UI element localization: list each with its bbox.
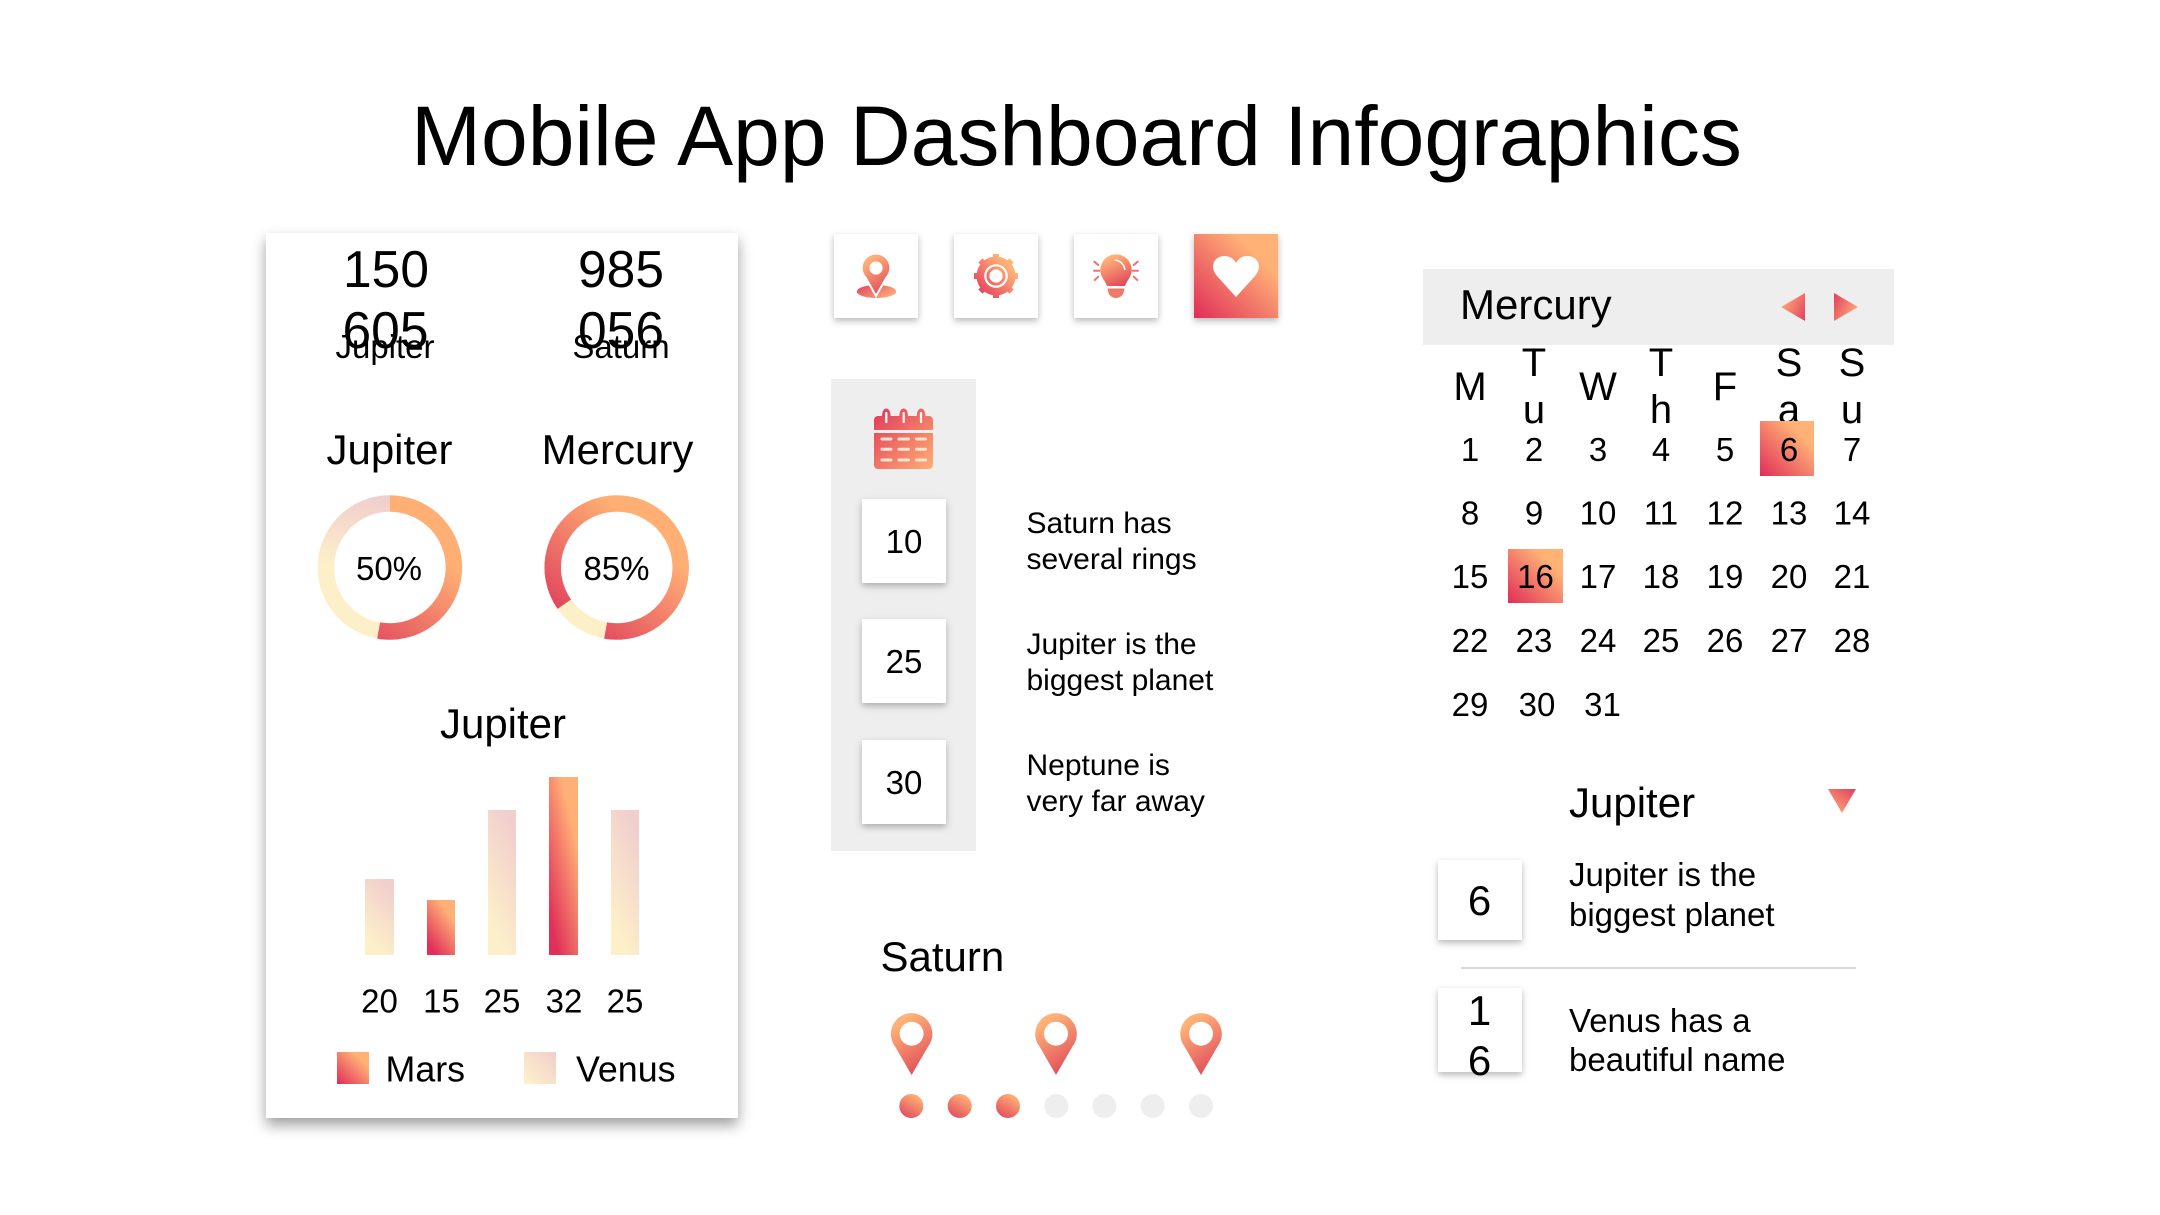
weekday labels: S [1839,341,1865,385]
panel: calendar list [831,379,976,851]
donut chart: Jupiter 50% [326,503,454,631]
text: Neptune is very far away: Neptune is [1026,749,1170,782]
list item: 6: 6 [1468,877,1491,924]
bar chart: 20 [361,982,398,1020]
legend [337,1050,676,1090]
list item: 16: Venus has a [1569,1002,1751,1039]
weekday labels: u [1841,388,1863,432]
weekday labels: W [1579,365,1617,409]
icon tile: heart [1194,234,1278,318]
title: Mobile App Dashboard Infographics [411,89,1742,183]
legend: Mars [386,1050,465,1090]
calendar dates: 24 [1580,622,1616,659]
calendar header [1423,269,1894,345]
list item: 16: 6 [1468,1037,1491,1084]
calendar dates: 19 [1707,558,1743,595]
text: Neptune is very far away: very far away [1026,785,1205,818]
weekday labels: T [1522,341,1546,385]
calendar dates: 30 [1519,686,1555,723]
item box: 30 [862,740,946,824]
donut chart: Mercury 85% [553,503,681,631]
calendar dates: 15 [1452,558,1488,595]
calendar dates: 8 [1461,494,1479,532]
heading: Jupiter dropdown: Jupiter [1569,779,1695,826]
stat: Saturn [572,240,670,365]
bar chart: 32 [546,982,582,1020]
calendar dates: 14 [1834,494,1870,532]
weekday labels [1453,341,1865,432]
stat: Jupiter: 150 [343,240,429,298]
stat: Saturn: 056 [578,301,664,359]
text: Neptune is very far away [1026,749,1205,818]
icon tile: location pin [834,234,918,318]
list item: 16: 1 [1468,987,1491,1034]
legend: Venus [576,1050,676,1090]
map pins [891,1013,1222,1075]
heading: Jupiter bar chart: Jupiter [440,700,566,747]
calendar dates: 27 [1771,622,1807,659]
calendar dates: 29 [1452,686,1488,723]
calendar dates: 3 [1589,431,1607,468]
calendar dates: 28 [1834,622,1870,659]
calendar dates: 5 [1716,431,1734,468]
calendar dates: 12 [1707,494,1743,532]
calendar dates: 2 [1525,431,1543,468]
calendar dates: 22 [1452,622,1488,659]
calendar dates: 25 [1643,622,1679,659]
calendar dates: 1 [1461,431,1479,468]
icon tile: light bulb [1074,234,1158,318]
calendar dates: 16 [1517,558,1554,595]
text: Jupiter is the biggest planet [1026,628,1214,697]
calendar dates: 31 [1584,686,1621,723]
calendar dates: 18 [1643,558,1679,595]
heading: Jupiter donut: Jupiter [326,426,453,473]
panel: mobile dashboard card [266,233,738,1118]
heading: Saturn: Saturn [880,933,1004,980]
calendar dates: 10 [1580,494,1616,532]
bar chart: 25 [607,982,643,1020]
calendar dates: 4 [1652,431,1670,468]
calendar dates: 11 [1644,494,1678,532]
bar chart: 15 [423,982,460,1020]
weekday labels: F [1713,365,1737,409]
donut chart: Jupiter 50%: 50% [356,550,422,587]
weekday labels: T [1649,341,1673,385]
calendar dates [1452,431,1870,723]
list item: 6: Jupiter is the [1569,856,1756,893]
list item: 16 [1438,987,1785,1084]
calendar header: Mercury [1460,281,1612,328]
text: Saturn has several rings: Saturn has [1026,507,1172,540]
calendar dates: 21 [1834,558,1870,595]
weekday labels: h [1650,388,1672,432]
icon: calendar [874,408,933,469]
weekday labels: M [1453,365,1487,409]
stat: Saturn: Saturn [572,328,670,365]
icon tile: gear [954,234,1038,318]
calendar dates: 23 [1516,622,1552,659]
item box: 25 [862,619,946,703]
list item: 6 [1438,856,1774,940]
calendar dates: 7 [1843,431,1861,468]
text: Saturn has several rings [1026,507,1197,576]
item box: 25: 25 [886,643,922,680]
calendar dates: 9 [1525,494,1543,532]
calendar dates: 6 [1780,431,1798,468]
progress dots [899,1094,1213,1118]
stat: Jupiter [335,240,435,365]
stat: Saturn: 985 [578,240,664,298]
calendar dates: 26 [1707,622,1743,659]
item box: 30: 30 [886,764,922,801]
text: Jupiter is the biggest planet: biggest planet [1026,664,1214,697]
heading: Jupiter dropdown [1569,779,1856,826]
weekday labels: S [1776,341,1802,385]
heading: Mercury donut: Mercury [542,426,693,473]
calendar dates: 17 [1580,558,1616,595]
weekday labels: a [1778,388,1801,432]
item box: 10: 10 [886,523,922,560]
stat: Jupiter: 605 [343,301,428,359]
donut chart: Mercury 85%: 85% [583,550,650,587]
text: Saturn has several rings: several rings [1026,543,1197,576]
highlighted day: 6 [1760,421,1814,476]
item box: 10 [862,499,946,583]
bar chart: 25 [484,982,520,1020]
weekday labels: u [1523,388,1545,432]
text: Jupiter is the biggest planet: Jupiter is the [1026,628,1197,661]
calendar dates: 20 [1771,558,1807,595]
calendar dates: 13 [1771,494,1807,532]
highlighted day: 16 [1508,549,1563,603]
list item: 6: biggest planet [1569,896,1774,933]
stat: Jupiter: Jupiter [335,328,435,365]
list item: 16: beautiful name [1569,1041,1785,1078]
bar chart [361,777,643,1020]
panel: month calendar [1423,269,1894,723]
